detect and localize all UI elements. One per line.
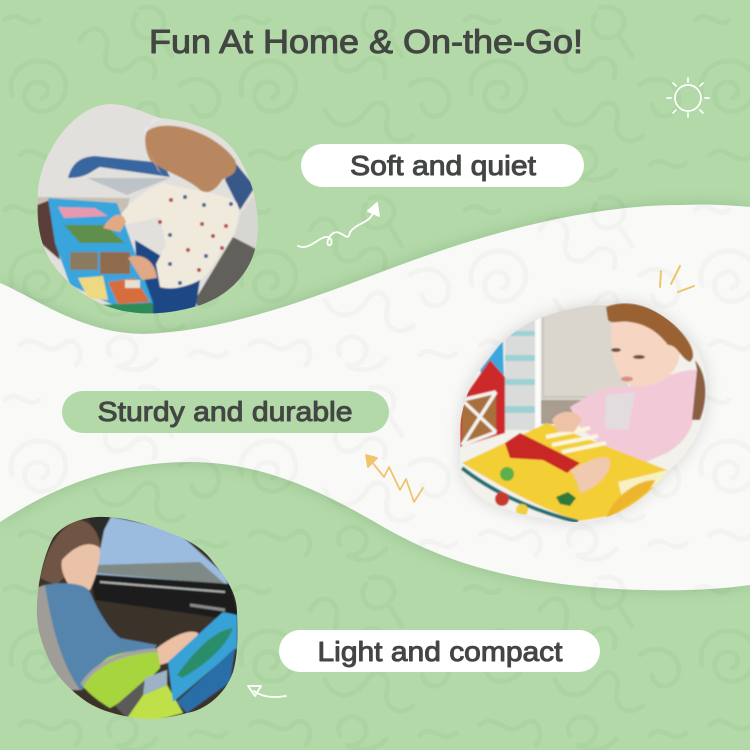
hoodie [570, 370, 700, 470]
hair [606, 303, 693, 362]
chair [692, 360, 705, 420]
white wave band [0, 205, 750, 590]
seat [30, 585, 82, 690]
hands [103, 215, 126, 232]
icon: sun [667, 78, 709, 117]
white band squiggle pattern [25, 204, 716, 590]
book [48, 198, 153, 305]
barn [460, 360, 505, 447]
pill: Soft and quiet [301, 144, 584, 187]
photo: child with barn book [455, 300, 715, 525]
arrow: white left [248, 686, 286, 697]
title: Fun At Home & On-the-Go! [149, 23, 583, 60]
blue book [168, 612, 237, 702]
sweater [118, 183, 239, 288]
booster seat [82, 651, 160, 708]
hair [145, 126, 236, 192]
arrow: orange zigzag [366, 455, 423, 502]
decoration: orange sparks [660, 266, 694, 292]
photo: child in car [36, 516, 238, 719]
hand [157, 632, 198, 665]
girl [40, 520, 100, 585]
hands [552, 412, 582, 432]
white wave band shadow [0, 205, 750, 590]
pill: Light and compact [279, 630, 600, 672]
pill: Sturdy and durable [62, 391, 389, 433]
pill: Soft and quiet: Soft and quiet [350, 150, 536, 181]
seat headrest [87, 178, 170, 195]
yellow book [462, 423, 667, 521]
pill: Sturdy and durable: Sturdy and durable [98, 396, 352, 427]
pill: Light and compact: Light and compact [318, 636, 563, 667]
window [95, 516, 228, 584]
photo: child on airplane [37, 104, 258, 314]
arrow: white curly [298, 203, 379, 247]
face [611, 320, 680, 387]
